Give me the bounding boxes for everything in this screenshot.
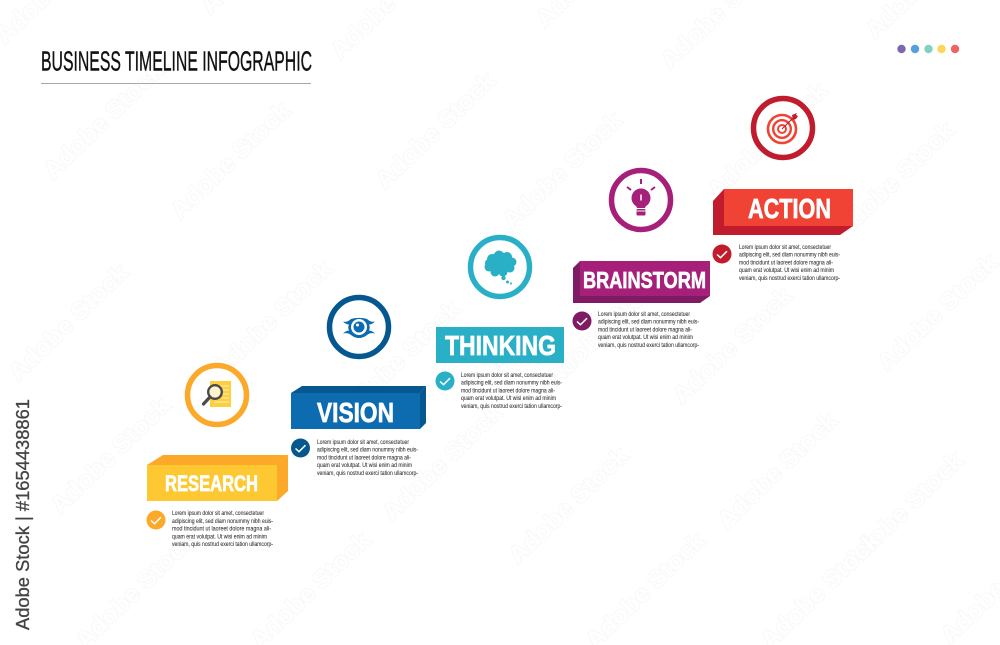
stock credit: Adobe Stock | #1654438861 (12, 399, 33, 630)
text: brainstorm: quam erat volutpat. Ut wisi enim ad minim (598, 334, 693, 341)
text: thinking: veniam, quis nostrud exerci tation ullamcorp- (461, 403, 562, 410)
text: action: Lorem ipsum dolor sit amet, consectetuer (739, 244, 832, 251)
text: action: adipiscing elit, sed diam nonummy nibh euis- (739, 252, 840, 259)
text: research: mod tincidunt ut laoreet dolore magna ali- (172, 526, 271, 533)
text: thinking: mod tincidunt ut laoreet dolore magna ali- (461, 387, 555, 394)
text: action: veniam, quis nostrud exerci tation ullamcorp- (739, 275, 840, 282)
watermark pattern: Adobe Stock (3, 259, 134, 386)
text: research: adipiscing elit, sed diam nonummy nibh euis- (172, 518, 273, 525)
watermark pattern: Adobe Stock (712, 407, 843, 534)
check icon: thinking (436, 372, 454, 390)
banner: research (147, 455, 288, 501)
text: vision: adipiscing elit, sed diam nonummy nibh euis- (317, 447, 418, 454)
text: brainstorm: veniam, quis nostrud exerci tation ullamcorp- (598, 342, 699, 349)
text: vision: veniam, quis nostrud exerci tation ullamcorp- (317, 470, 418, 477)
watermark pattern: Adobe Stock (540, 265, 671, 392)
text: brainstorm: mod tincidunt ut laoreet dolore magna ali- (598, 326, 692, 333)
watermark pattern: Adobe Stock (45, 392, 176, 519)
icon: light bulb (612, 170, 670, 230)
icon: magnifier on document (188, 366, 246, 424)
text: vision: mod tincidunt ut laoreet dolore magna ali- (317, 454, 411, 461)
watermark pattern: Adobe Stock (335, 295, 466, 422)
watermark pattern: Adobe Stock (370, 67, 501, 194)
text: brainstorm (598, 311, 699, 349)
text: thinking: quam erat volutpat. Ut wisi enim ad minim (461, 395, 556, 402)
text: brainstorm: adipiscing elit, sed diam nonummy nibh euis- (598, 319, 699, 326)
banner: brainstorm (573, 261, 710, 303)
watermark pattern: Adobe Stock (702, 77, 833, 204)
watermark pattern: Adobe Stock (829, 117, 960, 244)
text: action: mod tincidunt ut laoreet dolore magna ali- (739, 259, 833, 266)
check icon: vision (291, 438, 310, 458)
watermark pattern: Adobe Stock (207, 255, 338, 382)
banner: vision: VISION (317, 397, 394, 428)
icon: eye (330, 298, 388, 356)
banner: research: RESEARCH (165, 471, 258, 496)
text: brainstorm: Lorem ipsum dolor sit amet, consectetuer (598, 311, 691, 318)
banner: vision (291, 386, 426, 429)
text: research: Lorem ipsum dolor sit amet, consectetuer (172, 510, 265, 517)
text: research (172, 510, 273, 548)
icon: target with dart (754, 98, 812, 158)
text: vision (317, 439, 418, 477)
watermark pattern: Adobe Stock (165, 97, 296, 224)
watermark pattern: Adobe Stock (38, 57, 169, 184)
banner: brainstorm: BRAINSTORM (583, 267, 706, 293)
panel: thinking (436, 238, 564, 410)
panel: research (146, 366, 288, 548)
text: action: quam erat volutpat. Ut wisi enim ad minim (739, 267, 834, 274)
panel: brainstorm (572, 170, 710, 349)
text: action (739, 244, 840, 282)
icon: thought cloud (470, 238, 530, 296)
title: BUSINESS TIMELINE INFOGRAPHIC (41, 46, 312, 76)
watermark pattern: Adobe Stock (377, 399, 508, 526)
check icon: action (712, 244, 732, 264)
text: research: veniam, quis nostrud exerci tation ullamcorp- (172, 541, 273, 548)
colour dots (897, 45, 959, 53)
panel: action (712, 98, 853, 282)
watermark pattern: Adobe Stock (838, 447, 969, 574)
text: thinking: Lorem ipsum dolor sit amet, consectetuer (461, 372, 554, 379)
watermark pattern: Adobe Stock (667, 282, 798, 409)
text: vision: Lorem ipsum dolor sit amet, consectetuer (317, 439, 410, 446)
text: research: quam erat volutpat. Ut wisi enim ad minim (172, 533, 267, 540)
check icon: brainstorm (572, 312, 592, 330)
watermark pattern: Adobe Stock (497, 107, 628, 234)
watermark pattern: Adobe Stock (503, 442, 634, 569)
banner: thinking: THINKING (445, 330, 556, 361)
watermark pattern: Adobe Stock (872, 249, 1000, 376)
banner: action: ACTION (748, 193, 831, 224)
text: thinking: adipiscing elit, sed diam nonummy nibh euis- (461, 380, 562, 387)
text: vision: quam erat volutpat. Ut wisi enim ad minim (317, 462, 412, 469)
banner: action (713, 189, 853, 235)
text: thinking (461, 372, 562, 410)
check icon: research (146, 510, 166, 530)
panel: vision (291, 298, 426, 477)
title rule (41, 83, 311, 84)
